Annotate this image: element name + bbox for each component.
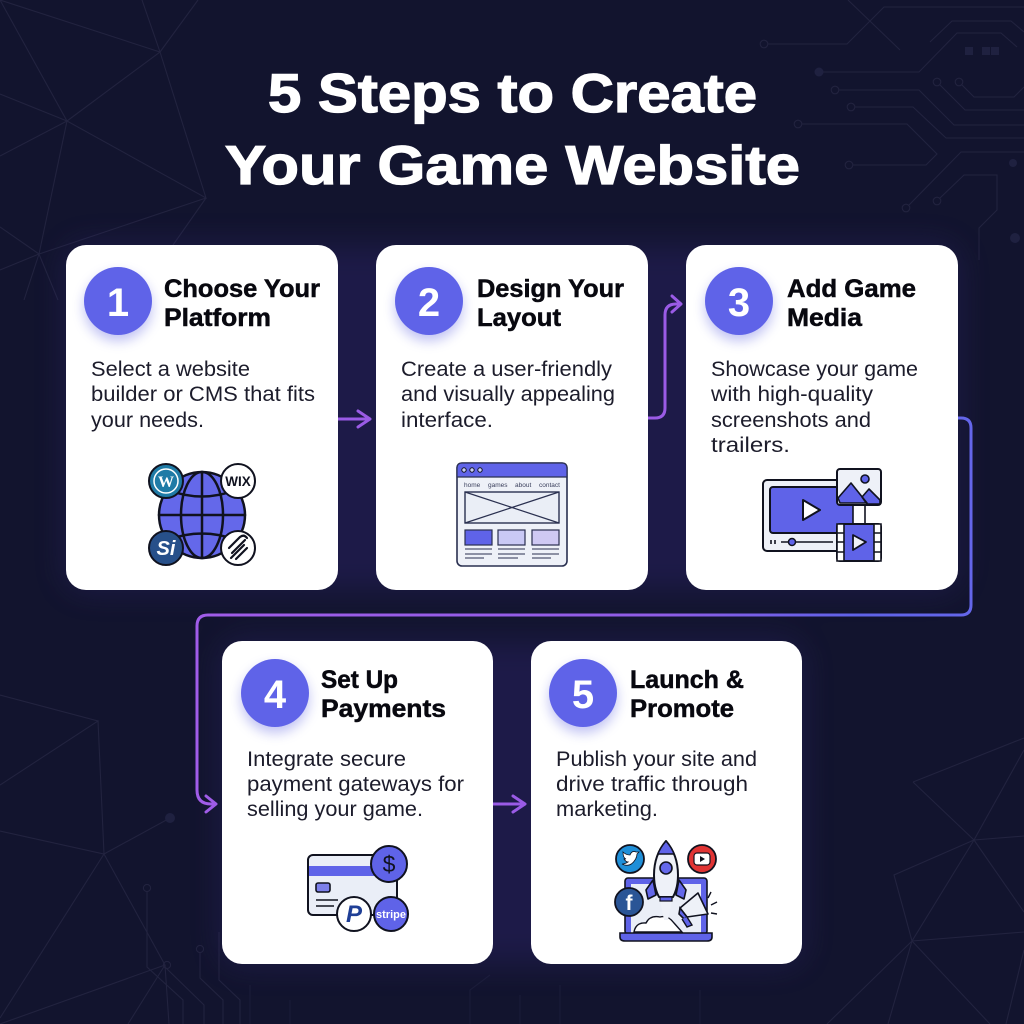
- description: step 5: marketing.: [556, 797, 658, 821]
- heading: set up payments: [321, 666, 446, 723]
- heading: launch and promote: [630, 666, 744, 723]
- description: step 3: Showcase your game: [711, 357, 918, 381]
- icon: globe with platform logos: W: [158, 474, 174, 491]
- heading: choose your platform: [164, 275, 320, 332]
- description: step 4: payment gateways for: [247, 772, 464, 796]
- heading: add game media: Media: [787, 304, 863, 332]
- heading: choose your platform: Platform: [164, 304, 271, 332]
- icon: video player, image and film: [763, 469, 881, 561]
- number badge 1: 1: [107, 281, 129, 325]
- arrow: step 2 to step 3: [648, 296, 681, 418]
- number badge 3: 3: [728, 281, 750, 325]
- description: step 2: interface.: [401, 408, 493, 432]
- panel: step 4 set up payments: [222, 641, 493, 964]
- icon: website wireframe: about: [515, 482, 531, 489]
- heading: launch and promote: Promote: [630, 695, 734, 723]
- heading: launch and promote: Launch &: [630, 666, 744, 694]
- icon: credit card with payment logos: $: [383, 851, 396, 877]
- description: step 4: [247, 747, 464, 821]
- description: step 5: [556, 747, 757, 821]
- description: step 2: [401, 357, 615, 432]
- arrow: step 3 to step 4: [197, 418, 971, 812]
- panel: step 2 design your layout: [376, 245, 648, 590]
- number badge 5: 5: [572, 673, 594, 717]
- description: step 4: selling your game.: [247, 797, 423, 821]
- icon: credit card with payment logos: P: [346, 901, 363, 928]
- icon: globe with platform logos: Si: [157, 538, 176, 560]
- heading: design your layout: Layout: [477, 304, 562, 332]
- description: step 5: drive traffic through: [556, 772, 748, 796]
- number badge 2: [395, 267, 463, 335]
- description: step 5: Publish your site and: [556, 747, 757, 771]
- description: step 3: trailers.: [711, 433, 790, 457]
- arrow: step 1 to step 2: [338, 411, 370, 427]
- icon: website wireframe: games: [488, 482, 508, 489]
- number badge 3: [705, 267, 773, 335]
- panel: step 1 choose your platform: [66, 245, 338, 590]
- description: step 1: Select a website: [91, 357, 250, 381]
- number badge 5: [549, 659, 617, 727]
- description: step 2: and visually appealing: [401, 382, 615, 406]
- heading: design your layout: [477, 275, 624, 332]
- heading: add game media: Add Game: [787, 275, 916, 303]
- heading: design your layout: Design Your: [477, 275, 624, 303]
- description: step 3: screenshots and: [711, 408, 871, 432]
- icon: globe with platform logos: [149, 464, 255, 565]
- heading: set up payments: Set Up: [321, 666, 398, 694]
- description: step 4: Integrate secure: [247, 747, 406, 771]
- number badge 4: [241, 659, 309, 727]
- arrow: step 4 to step 5: [493, 796, 525, 812]
- description: step 1: your needs.: [91, 408, 204, 432]
- number badge 2: 2: [418, 281, 440, 325]
- title: 5 Steps to Create: [268, 62, 757, 124]
- description: step 3: [710, 357, 918, 457]
- icon: credit card with payment logos: [308, 846, 408, 931]
- panel: step 5 launch and promote: [531, 641, 802, 964]
- panel: step 3 add game media: [686, 245, 958, 590]
- description: step 1: builder or CMS that fits: [91, 382, 315, 406]
- title: [225, 62, 800, 196]
- icon: website wireframe: contact: [539, 482, 560, 489]
- icon: website wireframe: home: [464, 482, 481, 489]
- heading: set up payments: Payments: [321, 695, 446, 723]
- number badge 1: [84, 267, 152, 335]
- description: step 2: Create a user-friendly: [401, 357, 612, 381]
- title: Your Game Website: [225, 134, 800, 196]
- description: step 1: [91, 357, 315, 432]
- icon: globe with platform logos: WIX: [225, 474, 251, 489]
- description: step 3: with high-quality: [710, 382, 873, 406]
- icon: website wireframe: [457, 463, 567, 566]
- icon: credit card with payment logos: stripe: [376, 909, 406, 921]
- icon: rocket launching from laptop with social logos: f: [626, 892, 634, 915]
- icon: rocket launching from laptop with social logos: [615, 841, 717, 941]
- number badge 4: 4: [264, 673, 287, 717]
- heading: add game media: [787, 275, 916, 332]
- heading: choose your platform: Choose Your: [164, 275, 320, 303]
